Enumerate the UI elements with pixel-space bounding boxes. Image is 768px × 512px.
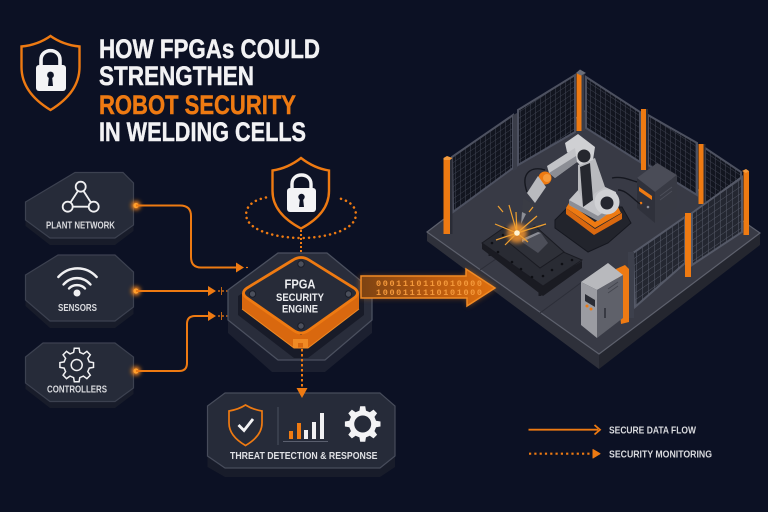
icon: gear outline bbox=[60, 348, 94, 382]
binary data bbox=[376, 279, 482, 298]
icon: central shield with lock and dotted ring bbox=[246, 158, 356, 258]
chip label: ENGINE bbox=[282, 304, 318, 316]
panel: threat detection and response bbox=[208, 388, 395, 477]
legend: secure data flow bbox=[528, 424, 696, 436]
panel: FPGA security engine bbox=[228, 253, 372, 372]
arrow: sensors to FPGA bbox=[132, 286, 231, 296]
icon: network triangle bbox=[63, 182, 99, 212]
arrow: plant network to FPGA bbox=[132, 201, 248, 272]
divider bbox=[277, 407, 279, 445]
dark control cabinet bbox=[637, 163, 677, 223]
fence: back right bbox=[586, 77, 741, 225]
arrow: FPGA data to welding cell bbox=[360, 269, 496, 306]
fence: front right bbox=[616, 177, 742, 324]
icon: wifi bbox=[58, 268, 97, 296]
dotted ring bbox=[246, 198, 356, 238]
label: sensors: SENSORS bbox=[58, 302, 97, 314]
title: IN WELDING CELLS bbox=[99, 117, 306, 147]
torch bbox=[522, 198, 535, 214]
chip top bbox=[244, 258, 358, 333]
legend: security monitoring bbox=[529, 448, 712, 460]
welding table bbox=[482, 226, 582, 296]
platform bbox=[427, 232, 760, 369]
fence: back left bbox=[452, 75, 575, 212]
arrowhead into panel bbox=[296, 388, 308, 398]
dotted arrow: FPGA to threat detection bbox=[301, 349, 303, 387]
robot arm bbox=[521, 134, 631, 252]
legend bbox=[528, 424, 712, 460]
legend: security monitoring: SECURITY MONITORING bbox=[609, 448, 712, 460]
cables bbox=[525, 169, 640, 204]
chip label: FPGA bbox=[284, 276, 316, 292]
icon: solid gear bbox=[345, 406, 381, 442]
binary data: 1000111110101000 bbox=[376, 288, 482, 298]
chip side bbox=[242, 293, 359, 348]
icon: bar chart bbox=[283, 413, 328, 442]
chip screws bbox=[249, 261, 352, 329]
label: controllers: CONTROLLERS bbox=[47, 384, 107, 396]
icon: check shield bbox=[229, 405, 262, 446]
title: HOW FPGAs COULD bbox=[99, 34, 320, 64]
label: threat detection: THREAT DETECTION & RESPONSE bbox=[230, 450, 378, 462]
binary data: 0001110110010000 bbox=[376, 279, 482, 289]
robot base bbox=[555, 207, 631, 252]
panel: plant network bbox=[26, 172, 134, 245]
label: plant network: PLANT NETWORK bbox=[46, 220, 115, 232]
forearm bbox=[547, 148, 577, 178]
title: STRENGTHEN bbox=[99, 61, 254, 91]
legend: secure data flow: SECURE DATA FLOW bbox=[609, 424, 696, 436]
orange joint bbox=[538, 172, 552, 184]
title: ROBOT SECURITY bbox=[99, 90, 296, 120]
panel: sensors bbox=[26, 255, 134, 328]
icon: title shield with lock bbox=[22, 36, 80, 110]
arrow: controllers to FPGA bbox=[132, 311, 231, 376]
dotted link: shield to FPGA bbox=[300, 230, 302, 258]
upper arm bbox=[578, 158, 605, 206]
illustration: isometric welding cell bbox=[427, 70, 760, 369]
chip label: SECURITY bbox=[276, 292, 325, 304]
wrist bbox=[527, 176, 546, 203]
gray electrical cabinet bbox=[581, 263, 623, 338]
icon: welding spark bbox=[495, 205, 546, 245]
chip label bbox=[276, 276, 325, 316]
fence posts: orange bbox=[444, 70, 749, 235]
panel: controllers bbox=[26, 343, 134, 408]
title bbox=[99, 34, 320, 147]
base plate bbox=[228, 253, 372, 372]
elbow bbox=[565, 134, 595, 165]
